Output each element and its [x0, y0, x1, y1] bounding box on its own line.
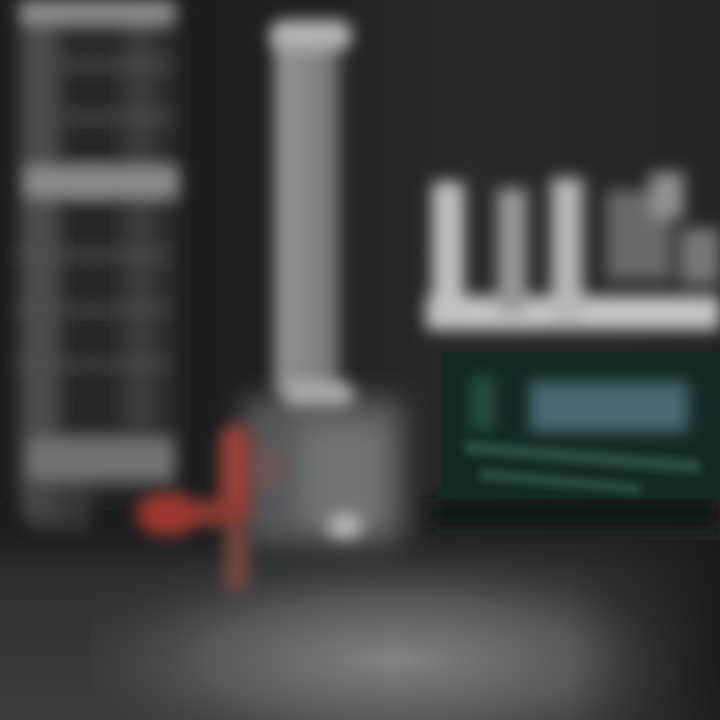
red pill left [136, 492, 200, 536]
letter stroke 1 [432, 182, 464, 318]
letter stroke 2 [497, 188, 527, 313]
dark green box [430, 352, 720, 528]
letter block 4 [606, 190, 672, 280]
rack upright right [126, 10, 156, 430]
left glass rack [14, 0, 180, 530]
letter accent 5 [650, 172, 684, 218]
tall cylinder [270, 20, 354, 412]
red capsule vertical [220, 425, 252, 525]
cylinder base ring [282, 384, 354, 412]
cylinder rim [270, 20, 352, 50]
rack foot [30, 480, 90, 530]
beaker body [240, 396, 405, 546]
beaker highlight [300, 425, 388, 530]
rack lower band [28, 438, 174, 480]
box small mark [472, 376, 494, 430]
heading baseline band [426, 296, 720, 330]
red capsule lower [224, 525, 250, 593]
letter stroke 3 [551, 178, 583, 323]
red right smear [256, 444, 288, 492]
letter accent 6 [680, 228, 720, 284]
floor surface [0, 520, 720, 720]
glass beaker [240, 396, 405, 546]
box shadow [430, 498, 720, 528]
rack middle band [24, 166, 180, 198]
box small text lines [465, 440, 700, 494]
box blue label [530, 382, 688, 432]
cylinder body [274, 35, 342, 395]
red pills and capsule [136, 425, 288, 593]
rack top band [20, 0, 175, 24]
rack body [15, 0, 180, 500]
white blurred heading [426, 172, 720, 330]
box face [442, 352, 720, 498]
red mid connection [195, 500, 240, 526]
rack upright left [22, 0, 58, 520]
beaker shine spot [327, 513, 363, 539]
rack faint bands [14, 60, 172, 369]
rack dark core [72, 40, 112, 420]
